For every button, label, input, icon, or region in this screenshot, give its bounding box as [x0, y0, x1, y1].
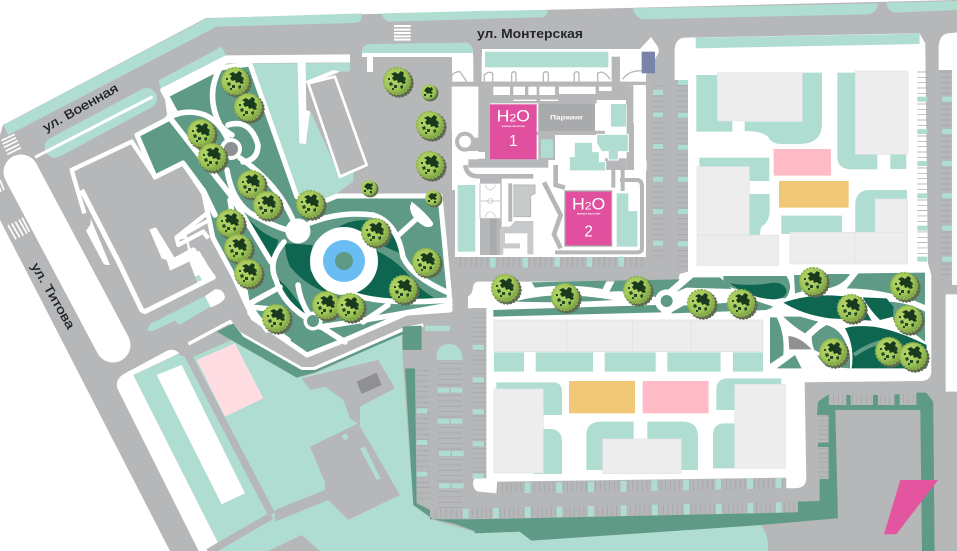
- parking hatching: [422, 72, 946, 514]
- arches: [452, 71, 642, 82]
- south park: [493, 273, 927, 368]
- paddle plaza: [397, 202, 433, 237]
- mint strip by the plot: [147, 296, 211, 332]
- south-west grounds: [117, 322, 482, 551]
- east lot white edges: [939, 32, 957, 392]
- west building plot outline: [72, 142, 225, 332]
- diagonal driveway: [183, 345, 272, 551]
- white connector: [812, 351, 820, 355]
- H2O building 2: H2O: [572, 195, 605, 213]
- white sidewalk strip: [117, 350, 218, 551]
- bottom lawn: [475, 525, 768, 551]
- donut: [455, 132, 475, 152]
- H2O building 2: жилые высотки: [576, 213, 601, 216]
- trees: [188, 68, 929, 372]
- pink plot: [643, 381, 709, 413]
- gray walkways: [465, 165, 642, 252]
- green verge strip: [217, 323, 422, 378]
- white parcel ground: [468, 33, 931, 493]
- orange plot: [569, 381, 635, 413]
- plaza circle: [286, 218, 310, 244]
- median of ул. Титова: [21, 172, 113, 345]
- light buildings: [697, 71, 908, 265]
- lot mint stripe: [342, 433, 381, 480]
- lower parcel: [268, 535, 321, 551]
- H2O building 1: [490, 104, 537, 159]
- street label: Монтерская: ул. Монтерская: [477, 26, 583, 41]
- dark shed: [357, 373, 382, 394]
- white rounded end: [205, 289, 225, 307]
- H2O building 1: H2O: [497, 108, 530, 126]
- orange plot: [779, 181, 849, 208]
- small parcel road and building: [302, 360, 395, 425]
- white vertical path: [298, 63, 340, 144]
- pink plot: [197, 343, 263, 417]
- light stripe in bed: [854, 340, 890, 355]
- gray driveways: [440, 48, 647, 170]
- top courtyard parts: [440, 48, 655, 171]
- white paths of the park: [163, 68, 450, 342]
- white cut-outs on drive: [452, 85, 647, 171]
- mint strip north: [485, 52, 608, 67]
- crosswalks: [0, 26, 411, 239]
- north lawn beside park: [250, 63, 367, 202]
- fountain: [310, 227, 378, 295]
- north-west mint strip: [159, 47, 227, 89]
- north mint strip: [696, 34, 920, 48]
- white courtyard base: [362, 37, 659, 257]
- pink plot: [774, 149, 831, 176]
- pink wedge marker: [884, 480, 938, 534]
- H2O building 2: [565, 191, 612, 246]
- north small circle: [220, 138, 242, 160]
- school building lot: [275, 423, 400, 522]
- south residential parcel contents: [494, 320, 785, 474]
- parking garage: [538, 103, 595, 132]
- green verge at south-west of parking: [405, 368, 482, 534]
- green parking frame: [475, 393, 935, 551]
- H2O residential complex: [362, 37, 659, 257]
- thin white ticks: [578, 249, 603, 250]
- mint pads: [541, 104, 628, 171]
- mint pads: [494, 352, 781, 474]
- dark planting beds: [247, 217, 434, 313]
- east residential parcel: [468, 33, 931, 493]
- gray plaza: [788, 336, 812, 349]
- sports and play lot: [480, 178, 535, 255]
- slate substation: [642, 52, 655, 73]
- lower courtyard parts: [458, 165, 642, 255]
- mint pad: [617, 193, 637, 247]
- white top edge: [188, 322, 423, 369]
- park green ground: [137, 64, 450, 355]
- H2O building 1: жилые высотки: [501, 125, 525, 128]
- row building: [494, 320, 763, 352]
- street label: Военная: ул. Военная: [41, 81, 121, 135]
- top green verges along ул. Монтерская: [3, 1, 957, 135]
- parking garage: Паркинг: [550, 115, 584, 122]
- H2O building 2: 2: [584, 223, 593, 240]
- west park beds: [493, 277, 773, 317]
- H2O building 1: 1: [509, 133, 518, 150]
- light buildings: [494, 384, 785, 474]
- gray garage block: [308, 77, 367, 177]
- white park boundary strip: [163, 58, 350, 92]
- island at ул. Военная: [35, 97, 153, 157]
- green lawn: [133, 334, 482, 551]
- street label: Титова: ул. Титова: [28, 260, 78, 332]
- mint strip west: [458, 185, 475, 252]
- stub: [367, 56, 373, 72]
- parking green pads: [417, 80, 952, 518]
- white sports strip: [157, 365, 245, 504]
- east park beds: [723, 273, 927, 368]
- central park: [137, 64, 450, 355]
- small round plaza south: [304, 312, 322, 330]
- mint lawns: [696, 73, 907, 235]
